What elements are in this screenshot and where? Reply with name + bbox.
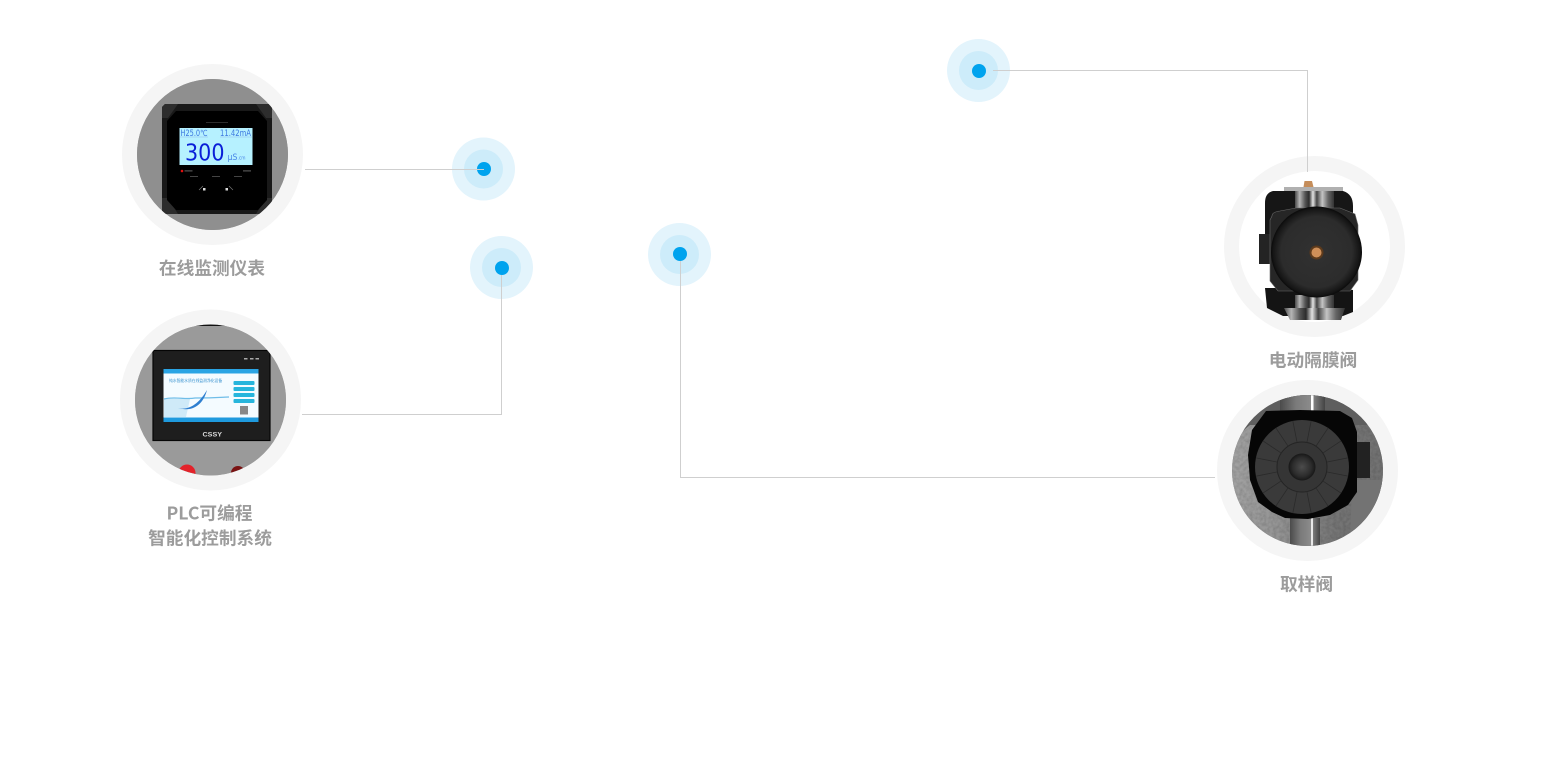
icon ring (130, 72, 296, 238)
connector line: PLC to hotspot (302, 275, 502, 414)
panel: sampling valve (1224, 388, 1390, 596)
touch screen: 纯水智能水质在线监测净化设备 (169, 378, 222, 383)
monitor screen: H25.0℃ (180, 129, 208, 139)
brand mark: CSSY (202, 432, 222, 438)
valve device (1232, 395, 1383, 546)
label: 在线监测仪表 (159, 254, 265, 280)
monitor screen: 300 (185, 138, 224, 166)
touch screen (164, 369, 258, 422)
touch panel device (135, 324, 286, 482)
valve device (1259, 181, 1362, 320)
connector line: diaphragm valve to hotspot (993, 70, 1308, 172)
panel: online monitor (130, 72, 296, 280)
panel: electric diaphragm valve (1232, 164, 1398, 372)
monitor screen: μS (228, 153, 238, 163)
icon ring (1224, 388, 1390, 554)
connector line: online monitor to hotspot (305, 168, 484, 170)
label: 电动隔膜阀 (1269, 346, 1357, 372)
red buttons (180, 464, 243, 474)
monitor indicators and buttons (181, 122, 251, 190)
hotspot: diaphragm valve (947, 39, 1010, 102)
label: PLC可编程 (166, 499, 253, 525)
icon ring (1232, 164, 1398, 330)
panel: PLC control system (128, 317, 294, 550)
label line 2: 智能化控制系统 (148, 524, 272, 550)
valve disk (1271, 206, 1362, 298)
monitor screen: 11.42mA (220, 129, 251, 139)
hotspot: PLC (470, 236, 533, 299)
monitor device (137, 79, 288, 230)
segmented cap (1255, 420, 1349, 514)
monitor screen: .cm (238, 156, 246, 162)
hotspot: sampling valve (648, 223, 711, 286)
monitor screen (180, 128, 252, 166)
connector line: sampling valve to hotspot (680, 261, 1215, 478)
copper center (1310, 246, 1324, 260)
icon ring (128, 317, 294, 483)
label: 取样阀 (1280, 570, 1333, 596)
hotspot: online monitor (452, 138, 515, 200)
